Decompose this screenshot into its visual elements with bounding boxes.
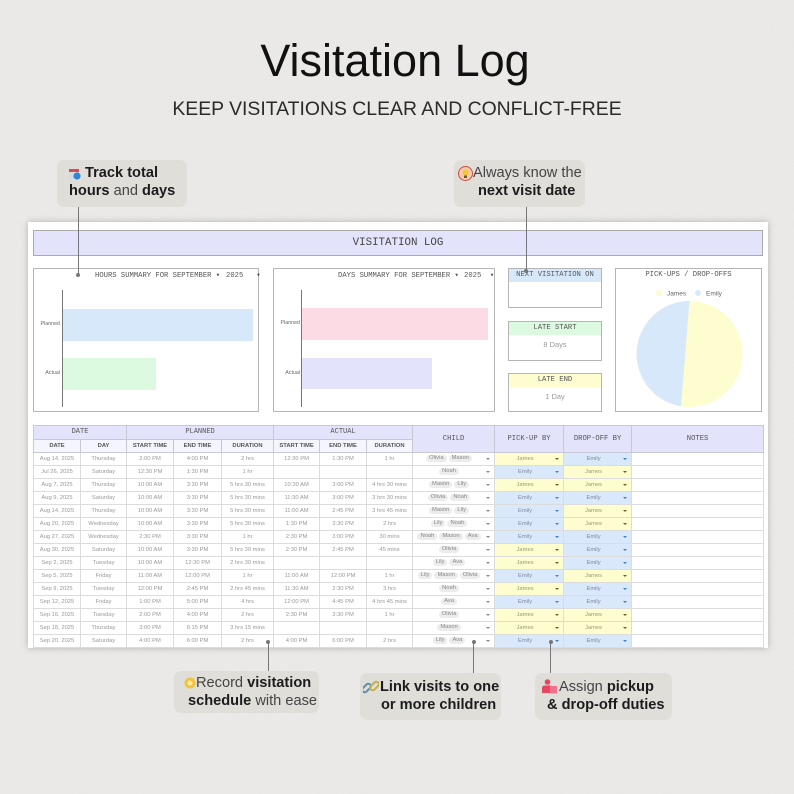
visitation log table: CHILD (443, 434, 464, 442)
visitation log table: 1:00 PM (139, 599, 161, 605)
visitation log table: 10:00 AM (138, 508, 162, 514)
visitation log table: 6:00 PM (332, 638, 354, 644)
label: planned: Planned (281, 320, 300, 326)
spreadsheet screenshot (28, 222, 768, 648)
visitation log table: Tuesday (92, 586, 115, 592)
visitation log table: Saturday (92, 547, 115, 553)
visitation log table: Friday (95, 599, 112, 605)
icon: calendar (69, 169, 81, 180)
visitation log table: 45 mins (379, 547, 400, 553)
visitation log table: 3:30 PM (332, 521, 354, 527)
visitation log table: Emily (518, 495, 532, 501)
visitation log table: 10:00 AM (138, 547, 162, 553)
visitation log table: 12:00 PM (284, 599, 309, 605)
callout text (547, 679, 665, 713)
bar: actual days (302, 358, 432, 389)
callout text (380, 679, 499, 713)
visitation log table: 2 hrs (241, 612, 254, 618)
visitation log table: 12:30 PM (138, 469, 162, 475)
visitation log table: Mason (437, 572, 455, 578)
visitation log table: 3 hrs 45 mins (372, 508, 407, 514)
callout text: next visit date (478, 183, 575, 199)
visitation log table: 2:45 PM (187, 586, 208, 592)
panel: pick-ups / drop-offs pie (615, 268, 762, 412)
visitation log table: 3 hrs (383, 586, 396, 592)
visitation log table: 2:30 PM (286, 612, 307, 618)
visitation log table: 12:00 PM (331, 573, 355, 579)
visitation log table: Noah (420, 533, 434, 539)
late start heading: LATE START (533, 324, 577, 332)
visitation log table: 4:00 PM (187, 456, 208, 462)
visitation log table: Emily (518, 469, 532, 475)
visitation log table: Emily (586, 495, 601, 501)
bar: actual hours (63, 358, 156, 390)
visitation log table: 4:45 PM (332, 599, 354, 605)
callout text: Track total (85, 165, 158, 181)
visitation log table: Emily (518, 521, 532, 527)
late end heading: LATE END (538, 376, 572, 384)
visitation log table: Emily (518, 534, 532, 540)
visitation log table: Sep 20, 2025 (40, 638, 74, 644)
visitation log table: 4 hrs (241, 599, 254, 605)
visitation log table: 2 hrs (383, 638, 396, 644)
pie chart with legend (636, 290, 742, 407)
visitation log table: James (516, 625, 534, 631)
visitation log table: Saturday (92, 638, 115, 644)
visitation log table: Olivia (442, 611, 456, 617)
visitation log table: Sep 5, 2025 (41, 573, 73, 579)
visitation log table: 10:30 AM (284, 482, 309, 488)
arrow: schedule callout to table (268, 641, 269, 671)
visitation log table: Thursday (91, 482, 116, 488)
visitation log table: 11:00 AM (284, 508, 309, 514)
visitation log table: 1:30 PM (286, 521, 307, 527)
visitation log table: Ava (444, 598, 454, 604)
visitation log table: 5 hrs 30 mins (230, 482, 265, 488)
icon: person with clipboard (542, 679, 557, 694)
visitation log table: Aug 7, 2025 (41, 482, 73, 488)
callout text (188, 675, 317, 709)
visitation log table: Noah (442, 585, 456, 591)
visitation log table: NOTES (687, 434, 708, 442)
visitation log table: 2 hrs (383, 521, 396, 527)
visitation log table: 1:30 PM (187, 469, 208, 475)
visitation log table: 10:00 AM (138, 560, 162, 566)
visitation log table: 4:00 PM (286, 638, 307, 644)
visitation log table: PLANNED (185, 428, 215, 436)
label: actual: Actual (285, 370, 300, 376)
visitation log table: 10:00 AM (138, 495, 162, 501)
visitation log table: 1 hr (385, 573, 395, 579)
visitation log table: Aug 9, 2025 (41, 495, 73, 501)
visitation log table: Lily (457, 507, 466, 513)
visitation log table: Emily (586, 560, 601, 566)
visitation log table: 3:00 PM (139, 625, 161, 631)
icon: lightbulb head (458, 166, 473, 181)
visitation log table: PICK-UP BY (507, 434, 551, 442)
callout text: Link visits to one (380, 679, 499, 695)
visitation log table: 5 hrs 30 mins (230, 495, 265, 501)
visitation log table: James (516, 482, 534, 488)
visitation log table: Sep 12, 2025 (40, 599, 74, 605)
arrow: hours callout to hours chart (78, 207, 79, 275)
panel: next visitation (508, 268, 602, 308)
arrow: next visit callout to next visitation panel (526, 207, 527, 271)
panel: late start (508, 321, 602, 361)
label: actual: Actual (45, 370, 60, 376)
visitation log table: Lily (457, 481, 466, 487)
visitation log table: Thursday (91, 456, 116, 462)
visitation log table: 11:30 AM (284, 586, 309, 592)
callout: record visitation schedule (174, 671, 319, 713)
visitation log table: 1 hr (385, 456, 395, 462)
visitation log table: 3:30 PM (187, 534, 208, 540)
visitation log table: James (516, 547, 534, 553)
visitation log table: 2:30 PM (286, 534, 307, 540)
next visitation heading: NEXT VISITATION ON (516, 271, 594, 279)
callout text: Assign pickup (559, 679, 654, 695)
visitation log table: Aug 14, 2025 (40, 508, 74, 514)
visitation log table: 12:30 PM (185, 560, 210, 566)
hours summary heading: HOURS SUMMARY FOR SEPTEMBER ▾ (95, 272, 220, 280)
visitation log table: Emily (518, 599, 532, 605)
days year selector: 2025 ▾ (464, 272, 494, 280)
chart axis (62, 290, 63, 407)
bar: planned hours (63, 309, 253, 341)
subtitle: KEEP VISITATIONS CLEAR AND CONFLICT-FREE (172, 98, 622, 120)
visitation log table: START TIME (133, 443, 167, 449)
visitation log table: Lily (434, 520, 442, 526)
label: planned: Planned (41, 321, 60, 327)
visitation log table: 4:00 PM (187, 612, 208, 618)
visitation log table: 3:30 PM (187, 508, 208, 514)
visitation log table: Lily (436, 559, 444, 565)
callout text: Always know the (473, 165, 582, 181)
visitation log table: Ava (452, 637, 462, 643)
visitation log table: Aug 30, 2025 (40, 547, 74, 553)
visitation log table: Sep 9, 2025 (41, 586, 73, 592)
title: Visitation Log (260, 35, 530, 86)
visitation log table: 3:30 PM (332, 612, 354, 618)
visitation log table: 3:30 PM (187, 547, 208, 553)
visitation log table: Tuesday (92, 612, 115, 618)
arrow: pickup callout to pick-up column (550, 641, 551, 673)
visitation log table: 11:30 AM (284, 495, 309, 501)
visitation log table: Sep 16, 2025 (40, 612, 74, 618)
visitation log table: 4:00 PM (139, 638, 161, 644)
callout text: hours and days (69, 183, 175, 199)
pie chart with legend: James (667, 290, 687, 298)
visitation log table: START TIME (279, 443, 314, 449)
visitation log table: Ava (452, 559, 462, 565)
visitation log table: 4 hrs 45 mins (372, 599, 407, 605)
visitation log table: Mason (432, 507, 449, 513)
visitation log table: 2:00 PM (139, 612, 161, 618)
visitation log table: Aug 27, 2025 (40, 534, 74, 540)
visitation log table: James (585, 625, 602, 631)
visitation log table: Saturday (92, 469, 115, 475)
visitation log table: 1 hr (243, 469, 253, 475)
arrow: children callout to child column (473, 641, 474, 673)
visitation log table: Olivia (431, 494, 445, 500)
callout: link visits to children (360, 673, 501, 720)
visitation log table: Noah (442, 468, 456, 474)
visitation log table: DAY (98, 443, 109, 449)
visitation log table: James (585, 612, 602, 618)
callout: next visit date (454, 160, 585, 207)
visitation log table: James (585, 573, 602, 579)
visitation log table: Olivia (442, 546, 456, 552)
visitation log table: Emily (518, 638, 532, 644)
bar: planned days (302, 308, 488, 340)
visitation log table: Lily (421, 572, 429, 578)
visitation log table: 2:30 PM (332, 586, 354, 592)
visitation log table: James (585, 521, 602, 527)
late start value: 8 Days (543, 340, 567, 349)
sheet title bar (33, 230, 763, 256)
visitation log table: END TIME (329, 443, 357, 449)
visitation log table: Emily (586, 456, 601, 462)
visitation log table: END TIME (184, 443, 211, 449)
visitation log table: Friday (95, 573, 112, 579)
visitation log table: Noah (453, 494, 467, 500)
visitation log table: 12:00 PM (185, 573, 210, 579)
visitation log table: Tuesday (92, 560, 115, 566)
late start heading (509, 322, 601, 335)
visitation log table: 30 mins (379, 534, 400, 540)
visitation log table: 3:30 PM (187, 495, 208, 501)
visitation log table: Olivia (429, 455, 444, 461)
visitation log table: 11:00 AM (284, 573, 309, 579)
visitation log table: Emily (518, 573, 532, 579)
visitation log table: 3 hrs 15 mins (230, 625, 265, 631)
visitation log table: Sep 18, 2025 (40, 625, 74, 631)
visitation log table: 12:00 PM (138, 586, 162, 592)
icon: clock badge (184, 678, 196, 688)
visitation log table: 3:00 PM (332, 495, 354, 501)
callout text (69, 165, 175, 199)
visitation log table: Mason (432, 481, 449, 487)
visitation log table: Emily (586, 534, 601, 540)
visitation log table: 11:00 AM (138, 573, 162, 579)
visitation log table: 6:15 PM (187, 625, 208, 631)
callout text: schedule with ease (188, 693, 317, 709)
visitation log table: Thursday (91, 625, 116, 631)
visitation log table: Mason (442, 533, 460, 539)
next visitation heading (509, 269, 601, 282)
visitation log table: Saturday (92, 495, 115, 501)
visitation log table: Thursday (91, 508, 116, 514)
visitation log table: 2 hrs 30 mins (230, 560, 265, 566)
visitation log table: 10:00 AM (138, 521, 162, 527)
visitation log table: 5 hrs 30 mins (230, 508, 265, 514)
visitation log table: Jul 26, 2025 (41, 469, 73, 475)
visitation log table: 1 hr (385, 612, 395, 618)
visitation log table: Emily (586, 638, 601, 644)
visitation log table: Emily (586, 547, 601, 553)
visitation log table: Mason (452, 455, 469, 461)
visitation log table: 1 hr (243, 573, 253, 579)
visitation log table (33, 425, 764, 648)
visitation log table: DATE (72, 428, 88, 436)
visitation log table: 1 hr (243, 534, 253, 540)
visitation log table: DATE (49, 443, 65, 449)
visitation log table: 3 hrs 30 mins (372, 495, 407, 501)
visitation log table: James (516, 612, 534, 618)
visitation log table: Emily (586, 586, 601, 592)
visitation log table: ACTUAL (330, 428, 356, 436)
visitation log table: Mason (440, 624, 458, 630)
visitation log table: Aug 14, 2025 (40, 456, 74, 462)
visitation log table: Ava (468, 533, 478, 539)
visitation log table: 3:00 PM (332, 534, 354, 540)
panel: hours summary chart (33, 268, 259, 412)
visitation log table: Emily (586, 599, 601, 605)
visitation log table: 3:00 PM (332, 482, 354, 488)
visitation log table: 2 hrs 45 mins (230, 586, 265, 592)
late end value: 1 Day (545, 392, 565, 401)
panel: days summary chart (273, 268, 495, 412)
icon: paperclip links (363, 680, 379, 694)
visitation log table: 10:00 AM (138, 482, 162, 488)
visitation log table: 2 hrs (241, 638, 254, 644)
visitation log table: Wednesday (88, 534, 119, 540)
visitation log table: 5:00 PM (187, 599, 208, 605)
visitation log table: 1:30 PM (332, 456, 354, 462)
visitation log table: 3:30 PM (187, 482, 208, 488)
visitation log table: 2:45 PM (332, 508, 354, 514)
callout text: Record visitation (196, 675, 311, 691)
panel: late end (508, 373, 602, 412)
visitation log table: Emily (518, 508, 532, 514)
callout text: & drop-off duties (547, 697, 665, 713)
visitation log table: James (516, 586, 534, 592)
late end heading (509, 374, 601, 387)
hours year selector: 2025 ▾ (226, 272, 261, 280)
visitation log table: James (516, 456, 534, 462)
visitation log table: James (585, 469, 602, 475)
visitation log table: 2 hrs (241, 456, 254, 462)
visitation log table: DURATION (232, 443, 263, 449)
visitation log table: 6:00 PM (187, 638, 208, 644)
visitation log table: Aug 20, 2025 (40, 521, 74, 527)
callout: track hours and days (57, 160, 187, 207)
chart axis (301, 290, 302, 407)
visitation log table: 5 hrs 30 mins (230, 547, 265, 553)
pie heading: PICK-UPS / DROP-OFFS (645, 271, 732, 279)
visitation log table: Olivia (463, 572, 477, 578)
visitation log table: 2:30 PM (286, 547, 307, 553)
visitation log table: James (585, 508, 602, 514)
visitation log table: 4 hrs 30 mins (372, 482, 407, 488)
visitation log table: James (516, 560, 534, 566)
callout: assign pickup and drop-off (535, 673, 672, 720)
visitation log table: 2:30 PM (139, 534, 161, 540)
days summary heading: DAYS SUMMARY FOR SEPTEMBER ▾ (338, 272, 459, 280)
visitation log table: Lily (436, 637, 444, 643)
visitation log table: James (585, 482, 602, 488)
visitation log table: Wednesday (88, 521, 119, 527)
visitation log table: 2:45 PM (332, 547, 354, 553)
visitation log table: DURATION (374, 443, 405, 449)
sheet title bar: VISITATION LOG (353, 237, 443, 249)
callout text: or more children (381, 697, 496, 713)
visitation log table: 12:30 PM (284, 456, 309, 462)
visitation log table: 3:30 PM (187, 521, 208, 527)
visitation log table: Noah (450, 520, 464, 526)
visitation log table: Sep 2, 2025 (41, 560, 73, 566)
pie chart with legend: Emily (706, 290, 723, 298)
callout text (473, 165, 582, 199)
visitation log table: 2:00 PM (139, 456, 161, 462)
visitation log table: 5 hrs 30 mins (230, 521, 265, 527)
visitation log table: DROP-OFF BY (574, 434, 621, 442)
